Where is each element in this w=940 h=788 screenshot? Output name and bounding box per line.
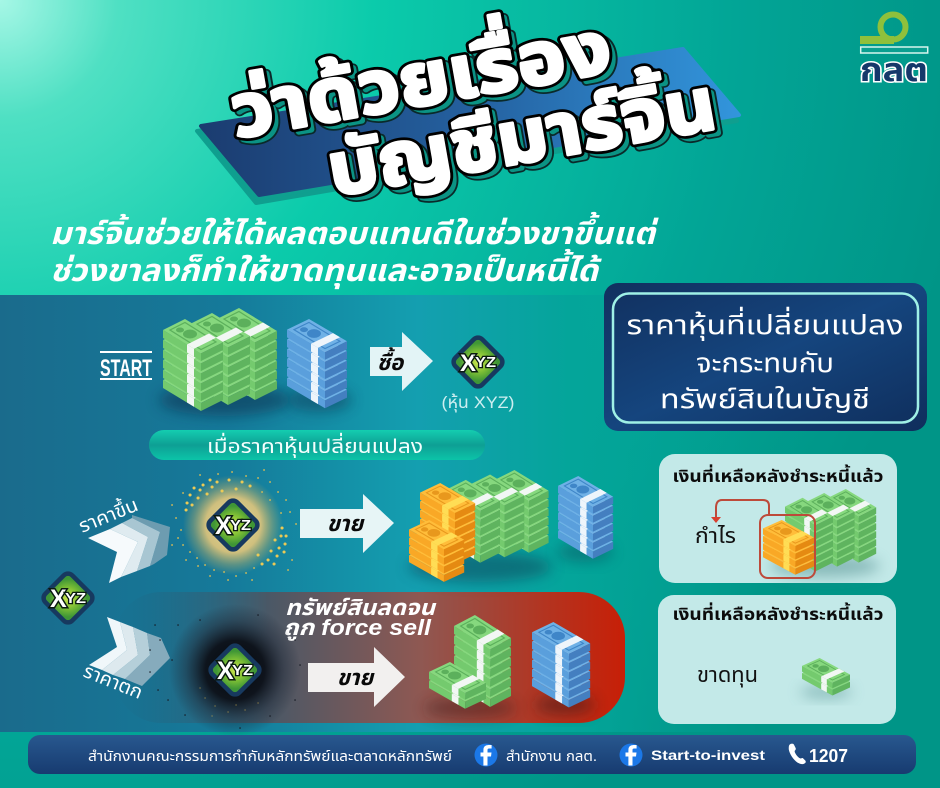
label: price down: ราคาตก	[80, 661, 145, 704]
panel: forced sell red band	[115, 592, 625, 723]
money: profit stacks	[763, 489, 880, 577]
icon: XYZ left	[41, 571, 95, 625]
icon: XYZ stock: YZ	[475, 354, 496, 371]
label: loss: ขาดทุน	[697, 664, 758, 688]
footer facebook page: Start-to-invest	[651, 747, 765, 763]
icon: XYZ left: X	[50, 585, 67, 613]
subtitle	[50, 211, 659, 290]
forced-sell heading: ทรัพย์สินลดจน	[285, 595, 437, 620]
callout: price change affects assets: จะกระทบกับ	[696, 348, 834, 378]
arrow: sell down: ขาย	[337, 665, 375, 690]
footer phone number: 1207	[809, 746, 848, 766]
title ribbon	[197, 49, 739, 203]
icon: phone	[789, 744, 806, 764]
arrow: sell up: ขาย	[327, 511, 365, 536]
label: profit: กำไร	[695, 525, 736, 548]
icon: XYZ price down with dark cloud: X	[217, 657, 234, 685]
arrow: price down chevrons	[89, 617, 170, 686]
forced-sell heading	[283, 595, 437, 641]
forced-sell heading: ถูก force sell	[283, 615, 432, 641]
icon: XYZ left: YZ	[65, 590, 86, 607]
heading pill: when the price changes	[149, 430, 485, 460]
start label	[100, 351, 152, 382]
callout: price change affects assets: ราคาหุ้นที่เปลี่ยนแปลง	[626, 306, 904, 341]
money: small stack	[800, 658, 852, 698]
arrow: price up chevrons	[88, 515, 170, 583]
callout: price change affects assets: ทรัพย์สินในบัญชี	[660, 384, 870, 414]
arrow: buy: ซื้อ	[377, 347, 405, 375]
logo	[860, 14, 928, 88]
money: start green and blue stacks	[159, 308, 352, 416]
icon: XYZ stock	[451, 335, 505, 389]
title: บัญชีมาร์จิ้น	[320, 56, 722, 212]
start label: START	[100, 355, 152, 382]
card heading: เงินที่เหลือหลังชำระหนี้แล้ว	[672, 464, 884, 486]
subtitle: มาร์จิ้นช่วยให้ได้ผลตอบแทนดีในช่วงขาขึ้นแต่	[50, 211, 659, 251]
footer agency name: สำนักงานคณะกรรมการกำกับหลักทรัพย์และตลาดหลักทรัพย์	[88, 749, 452, 765]
arrow: sell down	[308, 647, 405, 707]
icon: XYZ price up with gold glow: X	[215, 512, 232, 540]
title	[223, 0, 727, 216]
card heading: เงินที่เหลือหลังชำระหนี้แล้ว	[672, 602, 884, 624]
title: ว่าด้วยเรื่อง	[223, 0, 617, 154]
logo: กลต	[860, 51, 928, 88]
money: after price rise	[408, 470, 613, 582]
heading pill: when the price changes: เมื่อราคาหุ้นเปลี่ยนแปลง	[207, 432, 423, 458]
title: บัญชีมาร์จิ้น	[325, 60, 727, 216]
icon: XYZ price down with dark cloud: YZ	[232, 662, 253, 679]
footer bar	[28, 735, 916, 774]
icon: XYZ price down with dark cloud	[150, 604, 301, 736]
title: ว่าด้วยเรื่อง	[228, 0, 622, 158]
subtitle: ช่วงขาลงก็ทำให้ขาดทุนและอาจเป็นหนี้ได้	[50, 248, 602, 290]
card: loss after repaying debt	[658, 595, 896, 724]
panel: lower scenario background	[0, 295, 760, 732]
title: บัญชีมาร์จิ้น	[320, 56, 722, 212]
title: ว่าด้วยเรื่อง	[228, 0, 622, 158]
arrow: profit highlight	[711, 500, 815, 578]
icon: facebook second	[620, 744, 642, 766]
label: XYZ stock: (หุ้น XYZ)	[442, 392, 514, 413]
arrow: buy	[370, 332, 433, 391]
label: price up: ราคาขึ้น	[75, 491, 141, 538]
icon: facebook	[474, 744, 498, 766]
title: ว่าด้วยเรื่อง	[223, 0, 617, 154]
icon: XYZ price up with gold glow: YZ	[230, 517, 251, 534]
footer facebook name: สำนักงาน กลต.	[506, 749, 597, 765]
title: บัญชีมาร์จิ้น	[325, 60, 727, 216]
arrow: sell up	[300, 494, 394, 553]
icon: XYZ price up with gold glow	[172, 470, 296, 580]
card: profit after repaying debt	[659, 454, 897, 583]
callout: price change affects assets	[604, 283, 927, 431]
money: after price fall	[424, 615, 595, 718]
icon: XYZ stock: X	[460, 350, 476, 377]
